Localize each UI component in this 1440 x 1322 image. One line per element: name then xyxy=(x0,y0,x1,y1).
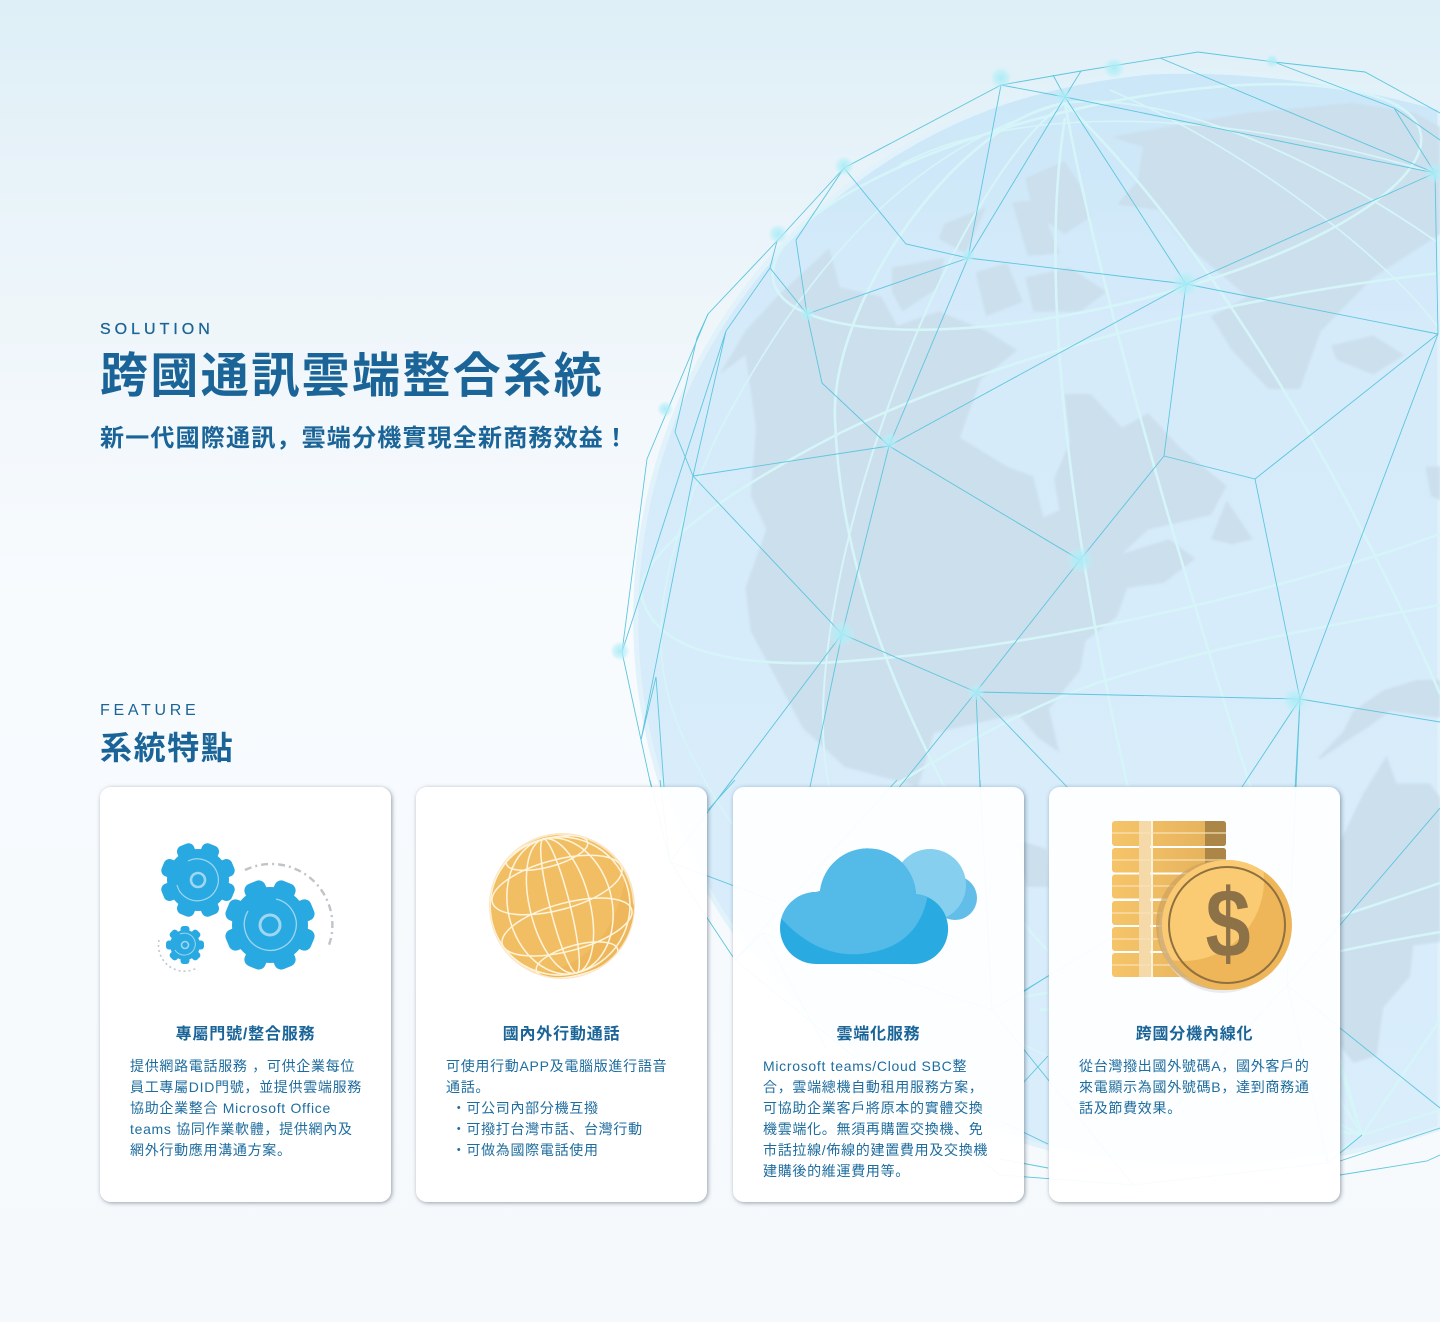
eyebrow: feature: FEATURE xyxy=(100,702,199,719)
card title: 跨國分機內線化 xyxy=(1136,1026,1253,1043)
panel: card 4 extension xyxy=(1049,787,1340,1202)
card text: 協助企業整合 Microsoft Office xyxy=(130,1100,331,1116)
main title: 跨國通訊雲端整合系統 xyxy=(100,350,604,402)
card text: 建購後的維運費用等。 xyxy=(763,1163,910,1179)
section heading: 系統特點 xyxy=(100,730,234,766)
card text: ・可做為國際電話使用 xyxy=(452,1142,599,1158)
card title: 專屬門號/整合服務 xyxy=(176,1026,315,1043)
card text: 可使用行動APP及電腦版進行語音 xyxy=(446,1058,667,1074)
icon: gears xyxy=(158,843,334,972)
icon: coins xyxy=(1112,821,1292,993)
card text: 來電顯示為國外號碼B，達到商務通 xyxy=(1079,1079,1310,1095)
latitude and longitude lines xyxy=(641,35,1440,1150)
card text: teams 協同作業軟體，提供網內及 xyxy=(130,1121,353,1137)
glowing nodes xyxy=(610,54,1440,713)
globe sphere xyxy=(636,71,1440,1168)
card text: ・可撥打台灣市話、台灣行動 xyxy=(452,1121,643,1137)
panel: card 2 mobile calling xyxy=(416,787,707,1202)
card text: 可協助企業客戶將原本的實體交換 xyxy=(763,1100,984,1116)
card title: 雲端化服務 xyxy=(836,1026,920,1043)
icon: coins: $ xyxy=(1205,869,1251,978)
card text: 通話。 xyxy=(446,1079,490,1095)
eyebrow: solution: SOLUTION xyxy=(100,321,214,338)
globe background xyxy=(611,52,1440,1186)
card title: 國內外行動通話 xyxy=(503,1026,620,1043)
card text: ・可公司內部分機互撥 xyxy=(452,1100,599,1116)
icon: golden globe xyxy=(489,833,635,979)
card text: 提供網路電話服務 ，可供企業每位 xyxy=(130,1058,355,1074)
card text: 機雲端化。無須再購置交換機、免 xyxy=(763,1121,984,1137)
card text: Microsoft teams/Cloud SBC整 xyxy=(763,1058,967,1074)
card text: 市話拉線/佈線的建置費用及交換機 xyxy=(763,1142,988,1158)
network lines xyxy=(622,52,1440,1185)
card text xyxy=(1079,1058,1310,1116)
card text: 員工專屬DID門號，並提供雲端服務 xyxy=(130,1079,362,1095)
continents xyxy=(719,103,1440,1063)
card text: 話及節費效果。 xyxy=(1079,1100,1182,1116)
card text: 網外行動應用溝通方案。 xyxy=(130,1142,292,1158)
card text xyxy=(446,1058,667,1158)
icon: cloud xyxy=(780,848,977,964)
card text xyxy=(763,1058,988,1179)
panel: card 3 cloud service xyxy=(733,787,1024,1202)
subtitle: 新一代國際通訊，雲端分機實現全新商務效益！ xyxy=(100,425,629,452)
panel: card 1 dedicated number xyxy=(100,787,391,1202)
card text: 從台灣撥出國外號碼A，國外客戶的 xyxy=(1079,1058,1310,1074)
card text xyxy=(130,1058,362,1158)
card text: 合，雲端總機自動租用服務方案， xyxy=(763,1079,984,1095)
